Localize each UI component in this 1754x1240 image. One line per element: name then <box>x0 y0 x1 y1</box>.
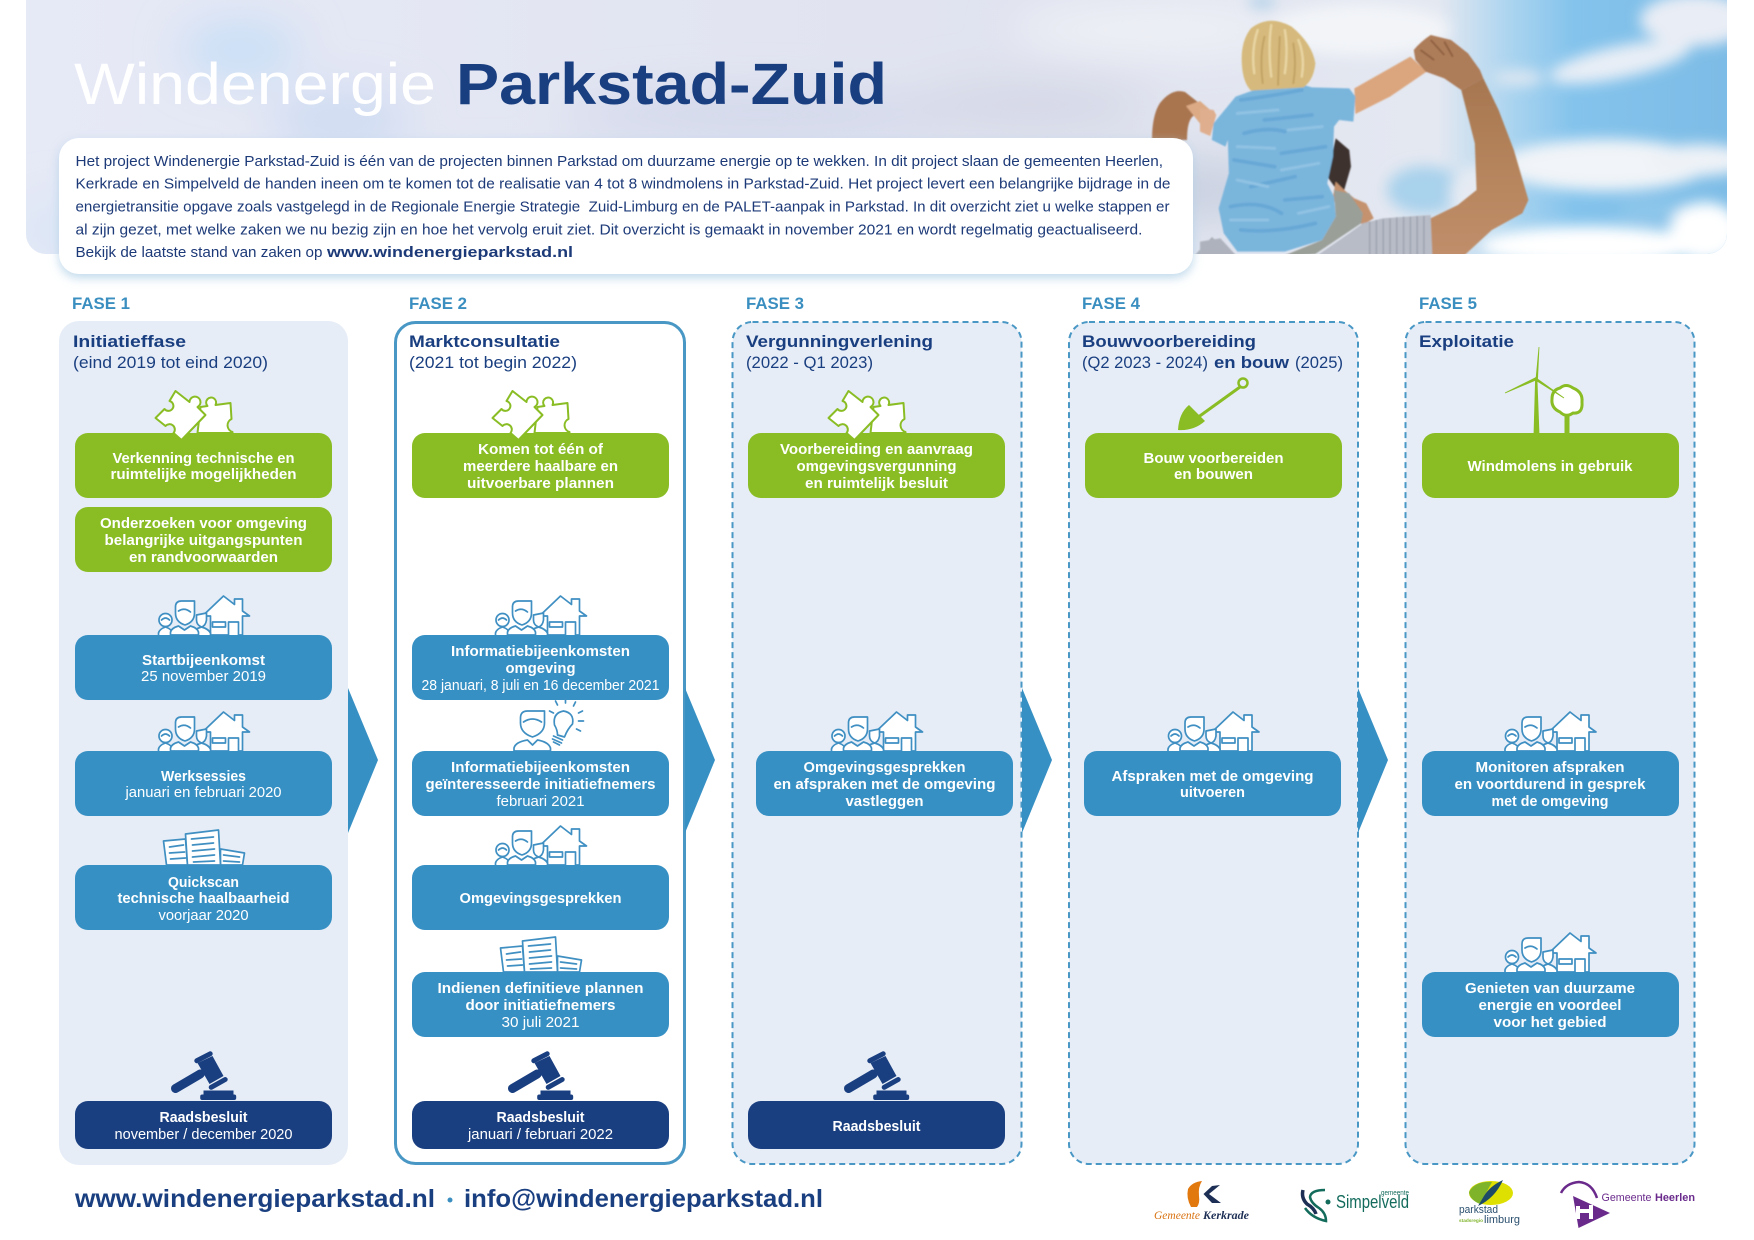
fase 3 label: FASE 3 <box>746 294 804 313</box>
box: komen tot plannen: Komen tot één of <box>478 442 603 458</box>
icon: people and house <box>158 596 250 635</box>
box: informatiebijeenkomsten omgeving: Informatiebijeenkomsten <box>451 644 630 660</box>
box: omgevingsgesprekken: Omgevingsgesprekken <box>460 891 622 907</box>
box: raadsbesluit: Raadsbesluit <box>160 1110 248 1126</box>
title <box>74 52 887 117</box>
icon: people and house <box>1168 712 1259 751</box>
box: informatiebijeenkomsten omgeving <box>412 635 669 700</box>
panel 3 background <box>732 322 1022 1164</box>
box: windmolens in gebruik <box>1422 433 1679 498</box>
arrow: fase 3 to 4 <box>1022 688 1052 833</box>
box: raadsbesluit: Raadsbesluit <box>496 1110 585 1126</box>
box: verkenning <box>75 433 332 498</box>
logo: gemeente Simpelveld: Simpelveld <box>1336 1192 1409 1212</box>
logo: gemeente Kerkrade: Gemeente <box>1154 1208 1201 1222</box>
box: raadsbesluit <box>412 1101 669 1149</box>
logo: gemeente Heerlen <box>1561 1182 1695 1228</box>
box: quickscan: voorjaar 2020 <box>158 908 248 924</box>
icon: person with light bulb <box>514 699 584 751</box>
panel 4 background <box>1069 322 1358 1164</box>
box: verkenning: ruimtelijke mogelijkheden <box>110 467 296 483</box>
panel: fase 5 <box>1406 294 1694 1164</box>
box: indienen plannen: 30 juli 2021 <box>502 1015 580 1031</box>
box: monitoren afspraken: Monitoren afspraken <box>1476 760 1624 776</box>
intro text panel <box>59 138 1193 274</box>
box: werksessies: januari en februari 2020 <box>124 785 282 801</box>
box: informatiebijeenkomsten initiatiefnemers: geïnteresseerde initiatiefnemers <box>426 777 656 793</box>
panel 5 background <box>1406 322 1694 1164</box>
box: raadsbesluit: januari / februari 2022 <box>467 1127 613 1143</box>
box: startbijeenkomst: Startbijeenkomst <box>142 653 265 669</box>
icon: shovel <box>1178 378 1248 430</box>
footer contact line <box>74 1185 823 1213</box>
box: informatiebijeenkomsten initiatiefnemers: februari 2021 <box>496 794 584 810</box>
logo: gemeente Kerkrade <box>1154 1181 1250 1222</box>
footer contact line: info@windenergieparkstad.nl <box>464 1185 823 1213</box>
icon: gavel <box>176 1054 236 1100</box>
fase 4 heading: Bouwvoorbereiding <box>1082 332 1256 351</box>
fase 4 heading: en bouw <box>1214 353 1290 372</box>
box: voorbereiding aanvraag: omgevingsvergunning <box>796 459 956 475</box>
box: bouw voorbereiden: en bouwen <box>1174 467 1253 483</box>
icon: puzzle <box>156 391 232 440</box>
fase 2 label: FASE 2 <box>409 294 467 313</box>
intro text panel: Kerkrade en Simpelveld de handen ineen om te komen tot de realisatie van 4 tot 8 windmolens in Parkstad-Zuid. Het project levert een belangrijke bijdrage in de <box>76 176 1170 192</box>
fase 3 heading <box>746 332 933 372</box>
box: startbijeenkomst: 25 november 2019 <box>141 669 266 685</box>
fase 1 heading: (eind 2019 tot eind 2020) <box>73 353 268 372</box>
logo: parkstad limburg: limburg <box>1484 1214 1520 1226</box>
icon: documents <box>500 937 582 972</box>
icon: puzzle <box>828 391 906 440</box>
box: genieten van energie <box>1422 972 1679 1037</box>
header photo banner <box>10 0 1750 266</box>
box: windmolens in gebruik: Windmolens in gebruik <box>1468 459 1633 475</box>
fase 3 heading: (2022 - Q1 2023) <box>746 353 873 372</box>
logo: gemeente Heerlen: Gemeente <box>1602 1192 1652 1204</box>
logo: gemeente Simpelveld: gemeente <box>1381 1188 1409 1197</box>
panel: fase 3 <box>732 294 1022 1164</box>
panel 1 background <box>59 321 348 1165</box>
footer contact line: www.windenergieparkstad.nl <box>74 1185 435 1213</box>
box: afspraken uitvoeren <box>1084 751 1341 816</box>
box: informatiebijeenkomsten omgeving: 28 januari, 8 juli en 16 december 2021 <box>422 678 660 694</box>
box: verkenning: Verkenning technische en <box>112 451 294 467</box>
logo: parkstad limburg: parkstad <box>1459 1204 1498 1216</box>
icon: people and house <box>158 712 250 751</box>
box: raadsbesluit <box>75 1101 332 1149</box>
logo: parkstad limburg <box>1459 1180 1520 1226</box>
box: komen tot plannen <box>412 433 669 498</box>
box: quickscan: technische haalbaarheid <box>118 891 290 907</box>
box: onderzoeken: Onderzoeken voor omgeving <box>100 516 307 532</box>
box: raadsbesluit: Raadsbesluit <box>832 1119 921 1135</box>
box: komen tot plannen: uitvoerbare plannen <box>467 476 614 492</box>
panel: fase 2 <box>396 294 684 1164</box>
box: voorbereiding aanvraag: en ruimtelijk besluit <box>805 476 948 492</box>
box: bouw voorbereiden: Bouw voorbereiden <box>1144 451 1284 467</box>
icon: puzzle <box>492 391 570 440</box>
box: komen tot plannen: meerdere haalbare en <box>463 459 618 475</box>
arrow: fase 1 to 2 <box>348 688 378 833</box>
icon: people and house <box>496 826 586 865</box>
intro text panel: Het project Windenergie Parkstad-Zuid is één van de projecten binnen Parkstad om duurzame energie op te wekken. In dit project slaan de gemeenten Heerlen, <box>76 153 1163 170</box>
intro text panel: Bekijk de laatste stand van zaken op <box>76 244 322 261</box>
panel 2 background <box>396 322 684 1164</box>
fase 1 label: FASE 1 <box>72 294 130 313</box>
box: quickscan <box>75 865 332 930</box>
box: onderzoeken: belangrijke uitgangspunten <box>104 533 302 549</box>
icon: people and house <box>1505 712 1596 751</box>
fase 2 heading <box>409 332 577 372</box>
box: omgevingsgesprekken <box>412 865 669 930</box>
icon: gavel <box>512 1054 573 1100</box>
panel: fase 1 <box>59 294 348 1165</box>
box: werksessies: Werksessies <box>161 769 246 785</box>
fase 4 heading: (2025) <box>1295 353 1343 372</box>
box: raadsbesluit: november / december 2020 <box>114 1127 292 1143</box>
fase 2 heading: (2021 tot begin 2022) <box>409 353 577 372</box>
icon: people and house <box>496 596 586 635</box>
fase 4 label: FASE 4 <box>1082 294 1141 313</box>
box: startbijeenkomst <box>75 635 332 700</box>
logo: parkstad limburg: stadsregio <box>1459 1218 1483 1223</box>
logo: gemeente Simpelveld <box>1302 1188 1409 1221</box>
logo: gemeente Heerlen: Heerlen <box>1655 1192 1695 1204</box>
intro text panel: www.windenergieparkstad.nl <box>326 244 573 261</box>
box: raadsbesluit <box>748 1101 1005 1149</box>
box: indienen plannen: door initiatiefnemers <box>466 998 616 1014</box>
box: onderzoeken: en randvoorwaarden <box>129 550 278 566</box>
box: informatiebijeenkomsten initiatiefnemers: Informatiebijeenkomsten <box>451 760 630 776</box>
fase 4 heading <box>1082 332 1343 372</box>
box: omgevingsgesprekken vastleggen: en afspraken met de omgeving <box>774 777 996 793</box>
fase 2 heading: Marktconsultatie <box>409 332 560 351</box>
box: indienen plannen <box>412 972 669 1037</box>
box: genieten van energie: energie en voordeel <box>1478 998 1622 1014</box>
box: monitoren afspraken: met de omgeving <box>1492 794 1608 810</box>
icon: people and house <box>1505 933 1596 972</box>
box: informatiebijeenkomsten initiatiefnemers <box>412 751 669 816</box>
box: omgevingsgesprekken vastleggen: vastleggen <box>846 794 924 810</box>
box: quickscan: Quickscan <box>168 875 239 891</box>
box: voorbereiding aanvraag <box>748 433 1005 498</box>
box: bouw voorbereiden <box>1085 433 1342 498</box>
title: Parkstad-Zuid <box>456 52 887 117</box>
box: voorbereiding aanvraag: Voorbereiding en aanvraag <box>780 442 973 458</box>
box: onderzoeken <box>75 507 332 572</box>
panel: fase 4 <box>1069 294 1358 1164</box>
box: indienen plannen: Indienen definitieve plannen <box>438 981 644 997</box>
intro text panel: al zijn gezet, met welke zaken we nu bezig zijn en hoe het vervolg eruit ziet. Dit overzicht is gemaakt in november 2021 en wordt regelmatig geactualiseerd. <box>76 222 1142 238</box>
arrow: fase 4 to 5 <box>1358 688 1388 833</box>
icon: people and house <box>832 712 922 751</box>
box: genieten van energie: Genieten van duurzame <box>1465 981 1635 997</box>
box: afspraken uitvoeren: Afspraken met de omgeving <box>1112 769 1314 785</box>
fase 4 heading: (Q2 2023 - 2024) <box>1082 353 1208 372</box>
fase 3 heading: Vergunningverlening <box>746 332 933 351</box>
title: Windenergie <box>74 52 436 117</box>
logo: gemeente Kerkrade: Kerkrade <box>1202 1208 1250 1222</box>
box: werksessies <box>75 751 332 816</box>
icon: documents <box>164 830 244 865</box>
box: informatiebijeenkomsten omgeving: omgeving <box>506 661 576 677</box>
box: monitoren afspraken <box>1422 751 1679 816</box>
fase 1 heading: Initiatieffase <box>73 332 186 351</box>
fase 1 heading <box>73 332 268 372</box>
icon: gavel <box>848 1054 909 1100</box>
box: monitoren afspraken: en voortdurend in gesprek <box>1454 777 1646 793</box>
icon: wind turbine and tree <box>1505 347 1582 433</box>
box: afspraken uitvoeren: uitvoeren <box>1180 785 1245 801</box>
child and father photo figures <box>1152 21 1528 260</box>
box: omgevingsgesprekken vastleggen <box>756 751 1013 816</box>
box: omgevingsgesprekken vastleggen: Omgevingsgesprekken <box>804 760 966 776</box>
arrow: fase 2 to 3 <box>685 688 715 833</box>
intro text panel: energietransitie opgave zoals vastgelegd in de Regionale Energie Strategie Zuid-Limburg en de PALET-aanpak in Parkstad. In dit overzicht ziet u welke stappen er <box>76 198 1170 216</box>
box: genieten van energie: voor het gebied <box>1494 1015 1606 1031</box>
fase 5 label: FASE 5 <box>1419 294 1477 313</box>
fase 5 heading: Exploitatie <box>1419 332 1514 351</box>
